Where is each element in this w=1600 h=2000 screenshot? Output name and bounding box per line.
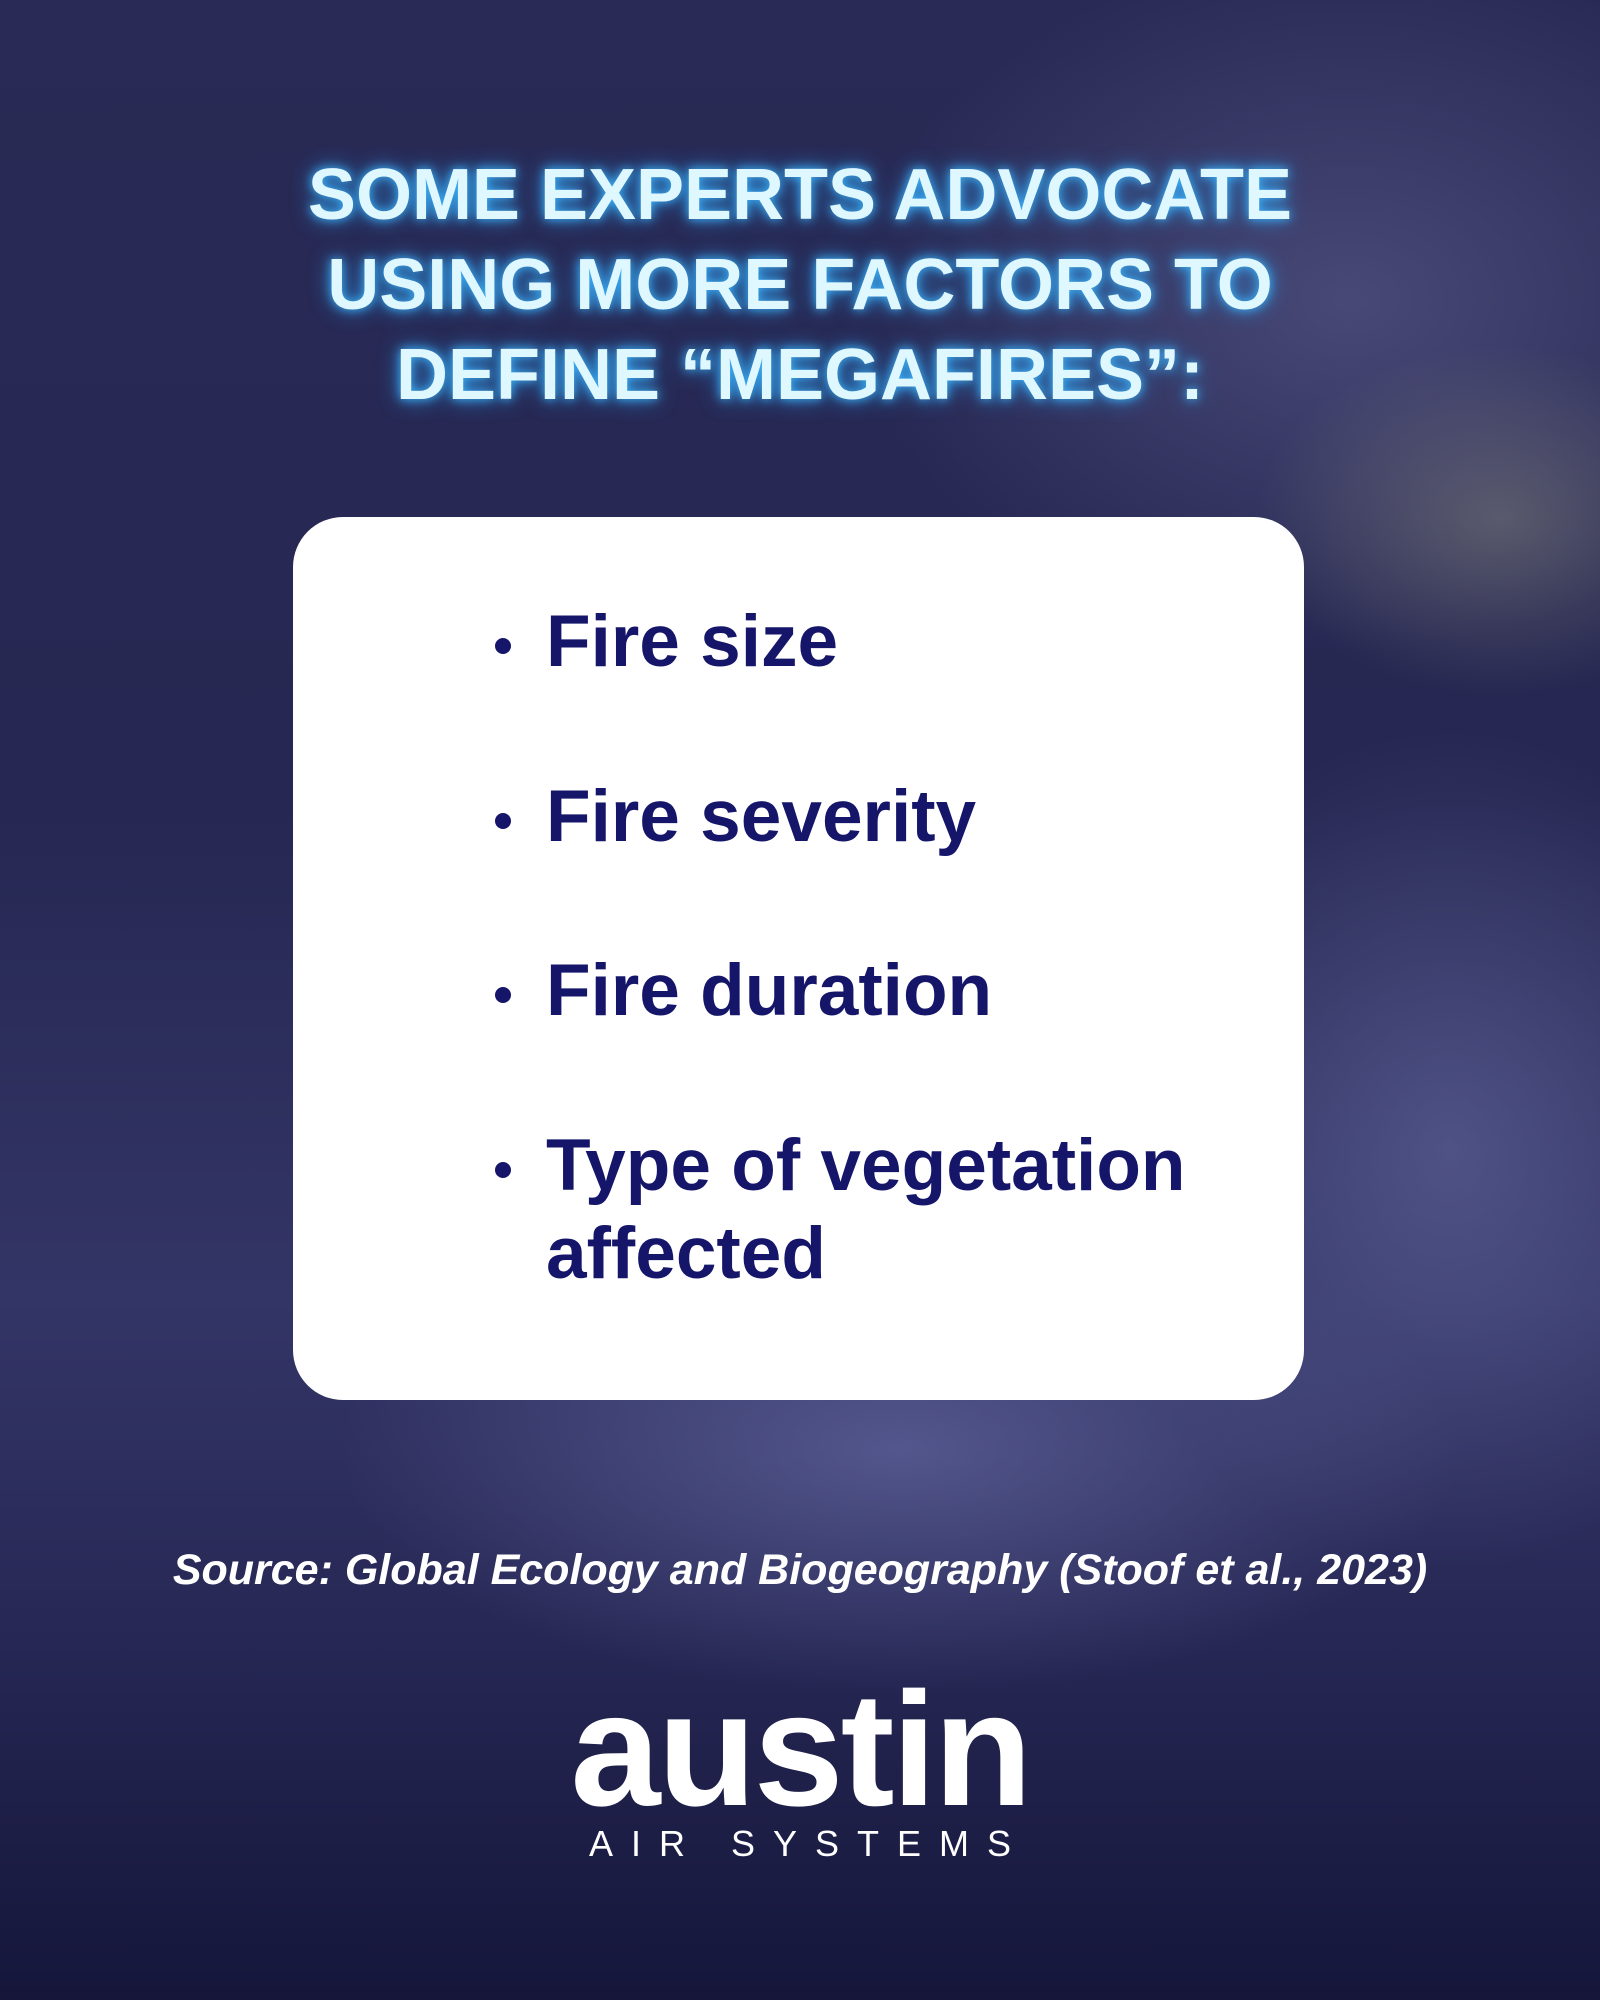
logo: AIR SYSTEMS bbox=[589, 1823, 1029, 1864]
title bbox=[299, 153, 1298, 415]
item: type of vegetation: Type of vegetation bbox=[546, 1125, 1186, 1206]
logo: austin bbox=[570, 1659, 1030, 1840]
title: SOME EXPERTS ADVOCATE bbox=[308, 155, 1292, 235]
item: type of vegetation bbox=[546, 1122, 1186, 1298]
item: fire severity: Fire severity bbox=[546, 776, 976, 857]
item: fire size: Fire size bbox=[546, 601, 838, 682]
panel: factors list bbox=[293, 517, 1304, 1400]
item: fire duration: Fire duration bbox=[546, 950, 992, 1031]
source text: Source: Global Ecology and Biogeography (Stoof et al., 2023) bbox=[173, 1546, 1427, 1594]
title: USING MORE FACTORS TO bbox=[327, 245, 1273, 325]
item: type of vegetation: affected bbox=[546, 1213, 826, 1294]
title: DEFINE “MEGAFIRES”: bbox=[396, 335, 1204, 415]
